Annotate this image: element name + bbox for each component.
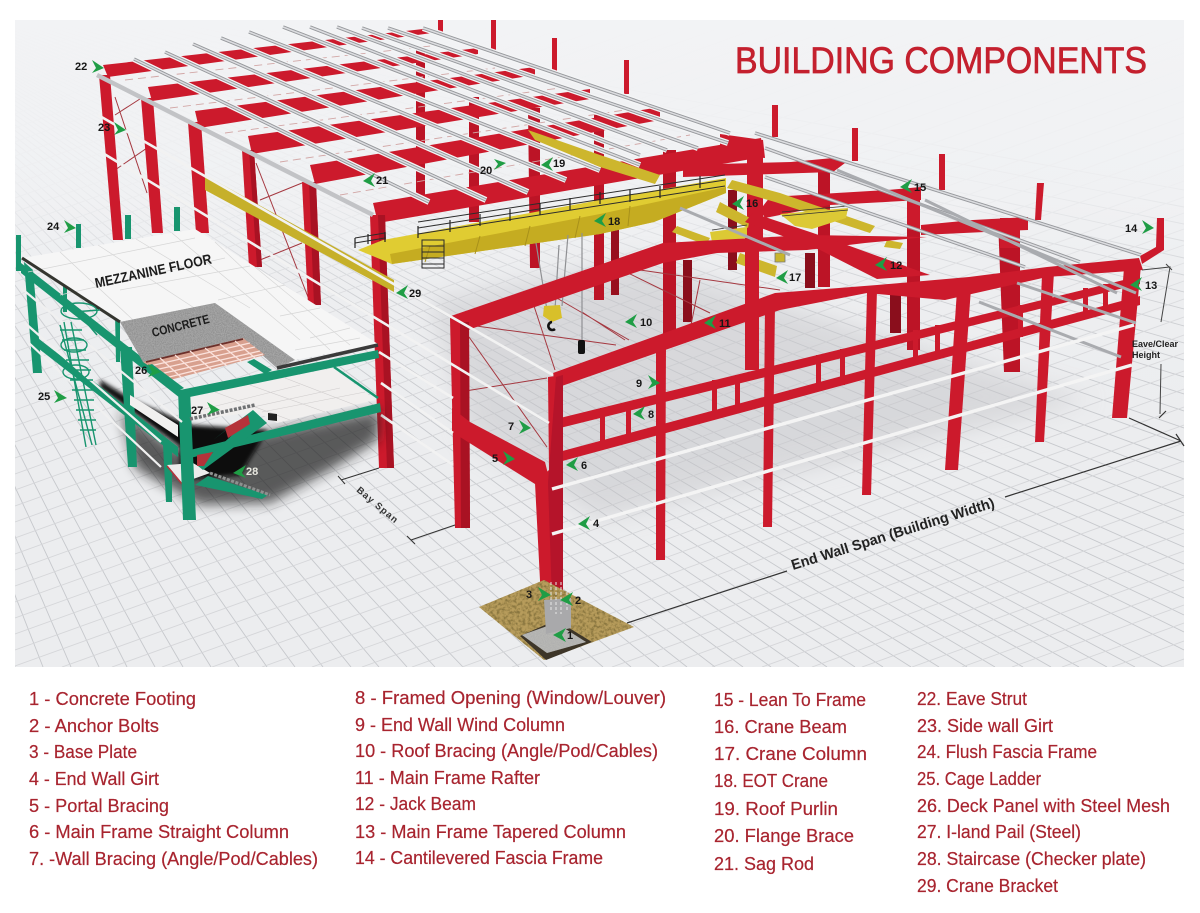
callout 15 bbox=[900, 179, 926, 194]
callout 3: 3 bbox=[526, 589, 532, 601]
legend column 1: 3 - Base Plate bbox=[29, 742, 137, 762]
callout 12: 12 bbox=[890, 260, 902, 272]
legend column 3: 20. Flange Brace bbox=[714, 826, 854, 846]
callout 1: 1 bbox=[567, 630, 573, 642]
callout 9 bbox=[636, 375, 660, 390]
callout 3 bbox=[526, 587, 551, 601]
callout 21 bbox=[363, 173, 388, 187]
legend column 2: 12 - Jack Beam bbox=[355, 794, 476, 814]
callout 24: 24 bbox=[47, 221, 60, 233]
left side wall columns bbox=[99, 75, 394, 468]
right bay frames bbox=[683, 134, 1028, 248]
mezzanine girts bbox=[21, 288, 182, 467]
callout 23 bbox=[98, 122, 126, 135]
legend column 1: 6 - Main Frame Straight Column bbox=[29, 822, 289, 842]
callout 25: 25 bbox=[38, 391, 50, 403]
callout 17: 17 bbox=[789, 272, 801, 284]
legend column 1 bbox=[29, 689, 318, 869]
main frame rafter bbox=[553, 258, 1143, 388]
second frame rafter bbox=[450, 213, 930, 528]
callout 11 bbox=[704, 315, 731, 330]
legend column 2: 11 - Main Frame Rafter bbox=[355, 768, 540, 788]
callout 10: 10 bbox=[640, 317, 652, 329]
callout 13: 13 bbox=[1145, 280, 1157, 292]
mezzanine beams and columns bbox=[145, 350, 381, 520]
callout 5: 5 bbox=[492, 453, 498, 465]
legend column 4: 26. Deck Panel with Steel Mesh bbox=[917, 796, 1170, 816]
crane runway beam bbox=[205, 175, 394, 292]
purlin gaps bbox=[134, 27, 730, 202]
callout 24 bbox=[47, 220, 76, 233]
label: concrete: CONCRETE bbox=[150, 312, 211, 340]
callout 8: 8 bbox=[648, 409, 654, 421]
callout 19: 19 bbox=[553, 158, 565, 170]
roof and wall bracing bbox=[115, 97, 780, 447]
callout 22: 22 bbox=[75, 61, 87, 73]
legend column 4: 29. Crane Bracket bbox=[917, 876, 1058, 896]
callout 15: 15 bbox=[914, 182, 926, 194]
legend column 1: 4 - End Wall Girt bbox=[29, 769, 159, 789]
end wall columns bbox=[656, 265, 1141, 560]
staircase bbox=[190, 405, 270, 499]
sag rods bbox=[125, 45, 690, 195]
legend column 1: 5 - Portal Bracing bbox=[29, 796, 169, 816]
callout 7: 7 bbox=[508, 421, 514, 433]
foundation pit bbox=[479, 580, 634, 660]
callout 6: 6 bbox=[581, 460, 587, 472]
legend column 2: 9 - End Wall Wind Column bbox=[355, 715, 565, 735]
dimension: eave height: Eave/Clear bbox=[1132, 339, 1179, 349]
legend bbox=[29, 688, 1170, 896]
legend column 3: 16. Crane Beam bbox=[714, 717, 847, 737]
callout 2 bbox=[560, 592, 581, 607]
main frame column bbox=[535, 375, 563, 600]
framed opening bbox=[555, 276, 1140, 463]
callouts bbox=[38, 60, 1157, 642]
callout 22 bbox=[75, 60, 104, 73]
callout 12 bbox=[875, 257, 902, 272]
callout 14 bbox=[1125, 220, 1154, 235]
panel: illustration bbox=[0, 0, 1184, 667]
legend column 3: 17. Crane Column bbox=[714, 744, 867, 764]
callout 29: 29 bbox=[409, 288, 421, 300]
legend column 3: 18. EOT Crane bbox=[714, 771, 828, 791]
dimension: eave height bbox=[1132, 264, 1179, 414]
callout 28: 28 bbox=[246, 466, 258, 478]
callout 4 bbox=[578, 516, 600, 530]
callout 20 bbox=[480, 159, 506, 177]
back side columns seen below roof bbox=[416, 50, 1020, 372]
callout 9: 9 bbox=[636, 378, 642, 390]
callout 7 bbox=[508, 420, 531, 434]
callout 6 bbox=[566, 457, 587, 472]
legend column 2: 8 - Framed Opening (Window/Louver) bbox=[355, 688, 666, 708]
dimension: bay span bbox=[338, 468, 455, 544]
legend column 3: 15 - Lean To Frame bbox=[714, 690, 866, 710]
callout 18: 18 bbox=[608, 216, 620, 228]
eave strut bbox=[97, 75, 373, 215]
dimension: end wall span: End Wall Span (Building Width) bbox=[789, 495, 997, 574]
callout 14: 14 bbox=[1125, 223, 1138, 235]
crane hook and cables bbox=[536, 233, 585, 354]
rear crane bbox=[710, 206, 848, 262]
callout 2: 2 bbox=[575, 595, 581, 607]
callout 27: 27 bbox=[191, 405, 203, 417]
access ladder bbox=[422, 240, 444, 268]
floor bbox=[0, 0, 1184, 667]
callout 28 bbox=[233, 465, 258, 478]
callout 4: 4 bbox=[593, 518, 600, 530]
label: mezzanine floor: MEZZANINE FLOOR bbox=[93, 251, 213, 291]
roof purlins bbox=[134, 27, 1141, 357]
legend column 4: 28. Staircase (Checker plate) bbox=[917, 849, 1146, 869]
legend column 1: 2 - Anchor Bolts bbox=[29, 716, 159, 736]
mezzanine shadow bbox=[100, 380, 380, 505]
title: BUILDING COMPONENTS bbox=[735, 40, 1147, 81]
callout 29 bbox=[396, 285, 421, 300]
dimension: end wall span bbox=[627, 411, 1184, 623]
back wall fascia stubs bbox=[438, 20, 1164, 264]
legend column 4: 24. Flush Fascia Frame bbox=[917, 742, 1097, 762]
callout 23: 23 bbox=[98, 122, 110, 134]
callout 1 bbox=[553, 628, 573, 642]
callout 25 bbox=[38, 390, 67, 403]
callout 17 bbox=[776, 270, 801, 284]
floor labels bbox=[93, 251, 213, 340]
dimension: bay span: Bay Span bbox=[354, 485, 400, 526]
legend column 4: 22. Eave Strut bbox=[917, 689, 1027, 709]
callout 20: 20 bbox=[480, 165, 492, 177]
legend column 4: 27. I-land Pail (Steel) bbox=[917, 822, 1081, 842]
callout 8 bbox=[633, 406, 654, 421]
legend column 3: 19. Roof Purlin bbox=[714, 799, 838, 819]
mezzanine upper deck bbox=[22, 229, 378, 380]
callout 21: 21 bbox=[376, 175, 388, 187]
callout 10 bbox=[625, 314, 652, 329]
legend column 3: 21. Sag Rod bbox=[714, 854, 814, 874]
EOT crane bbox=[355, 175, 726, 268]
legend column 4 bbox=[917, 689, 1170, 896]
callout 26: 26 bbox=[135, 365, 147, 377]
callout 11: 11 bbox=[719, 318, 731, 330]
legend column 4: 23. Side wall Girt bbox=[917, 716, 1053, 736]
dimension: eave height: Height bbox=[1132, 350, 1160, 360]
legend column 2: 10 - Roof Bracing (Angle/Pod/Cables) bbox=[355, 741, 658, 761]
cage ladder bbox=[60, 303, 100, 447]
legend column 2: 14 - Cantilevered Fascia Frame bbox=[355, 848, 603, 868]
legend column 4: 25. Cage Ladder bbox=[917, 769, 1041, 789]
callout 18 bbox=[594, 213, 620, 228]
callout 16 bbox=[732, 196, 758, 210]
legend column 2: 13 - Main Frame Tapered Column bbox=[355, 822, 626, 842]
lower mezzanine deck bbox=[130, 367, 378, 484]
legend column 1: 7. -Wall Bracing (Angle/Pod/Cables) bbox=[29, 849, 318, 869]
legend column 1: 1 - Concrete Footing bbox=[29, 689, 196, 709]
legend column 2 bbox=[355, 688, 666, 868]
callout 27 bbox=[191, 402, 220, 417]
callout 16: 16 bbox=[746, 198, 758, 210]
portal bracing bbox=[452, 408, 552, 490]
callout 26 bbox=[135, 364, 161, 377]
legend column 3 bbox=[714, 690, 867, 874]
roof rafters bbox=[103, 28, 763, 223]
back crane runway bbox=[528, 130, 903, 277]
callout 19 bbox=[541, 157, 565, 171]
callout 5 bbox=[492, 451, 515, 465]
side wall girts bbox=[98, 115, 553, 465]
mezzanine green frame bbox=[16, 207, 180, 502]
callout 13 bbox=[1130, 277, 1157, 292]
end wall girts bbox=[552, 325, 1134, 534]
